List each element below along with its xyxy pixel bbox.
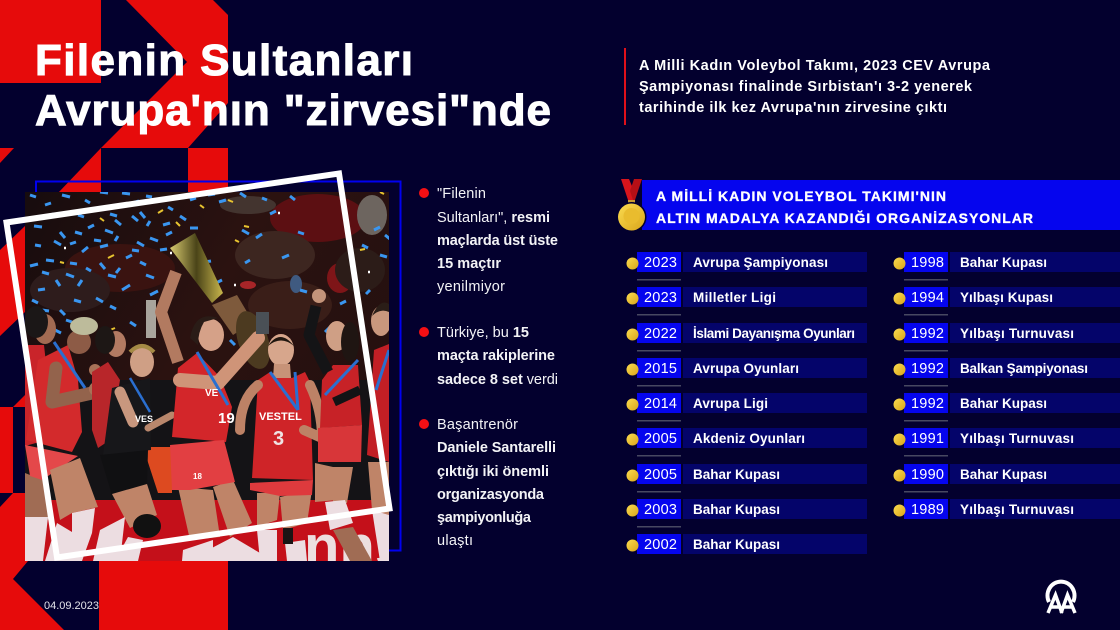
row 1989 Yılbaşı Turnuvası: Yılbaşı Turnuvası [960, 502, 1074, 517]
row 1992 Bahar Kupası [894, 393, 1120, 413]
row 2022 İslami Dayanışma Oyunları [626, 323, 867, 343]
row 1992 Bahar Kupası: Bahar Kupası [960, 396, 1047, 411]
row 2023 Avrupa Şampiyonası [626, 252, 867, 272]
row 1992 Yılbaşı Turnuvası: 1992 [911, 326, 944, 342]
separators [637, 279, 948, 528]
player at far right [367, 302, 391, 561]
row 2022 İslami Dayanışma Oyunları: 2022 [644, 326, 677, 342]
row 1998 Bahar Kupası: 1998 [911, 255, 944, 271]
row 1990 Bahar Kupası [894, 464, 1120, 484]
row 2023 Avrupa Şampiyonası: Avrupa Şampiyonası [693, 255, 828, 270]
row 1991 Yılbaşı Turnuvası: 1991 [911, 431, 944, 447]
row 2003 Bahar Kupası [626, 499, 867, 519]
bullet: head coach: organizasyonda [437, 487, 545, 503]
background red geometric shapes [0, 0, 228, 630]
crowd colour patches [30, 194, 387, 338]
player number 18: 18 [193, 472, 202, 481]
list header [642, 180, 1120, 230]
player number 18 [170, 312, 269, 561]
bullet: head coach [419, 417, 556, 549]
raised arm and trophy [161, 233, 277, 373]
bullet: unbeaten run: Sultanları", resmi [437, 210, 550, 226]
bullet: unbeaten run: "Filenin [437, 186, 486, 202]
player number 3 [240, 334, 322, 561]
date: 04.09.2023 [44, 600, 99, 612]
player number 3: VESTEL [259, 411, 302, 423]
bullet: head coach: şampiyonluğa [437, 510, 532, 526]
list column: right [894, 252, 1120, 519]
row 2003 Bahar Kupası: Bahar Kupası [693, 502, 780, 517]
row 2022 İslami Dayanışma Oyunları: İslami Dayanışma Oyunları [693, 326, 855, 341]
row 1992 Yılbaşı Turnuvası [894, 323, 1120, 343]
row 1994 Yılbaşı Kupası [894, 287, 1120, 307]
stand and banner behind players [25, 380, 389, 500]
row 1992 Balkan Şampiyonası [894, 358, 1120, 378]
row 2002 Bahar Kupası: 2002 [644, 537, 677, 553]
bullet: sets conceded: sadece 8 set verdi [437, 372, 558, 388]
row 1990 Bahar Kupası: Bahar Kupası [960, 467, 1047, 482]
intro text with red rule: A Milli Kadın Voleybol Takımı, 2023 CEV Avrupa [639, 58, 991, 74]
row 2014 Avrupa Ligi: Avrupa Ligi [693, 396, 768, 411]
row 2005 Akdeniz Oyunları: 2005 [644, 431, 677, 447]
player number 18: 19 [218, 410, 235, 427]
banner letters: nns [304, 514, 407, 579]
row 2014 Avrupa Ligi: 2014 [644, 396, 677, 412]
row 2015 Avrupa Oyunları: 2015 [644, 361, 677, 377]
player on the right [309, 289, 372, 561]
intro text with red rule [624, 48, 991, 125]
row 1989 Yılbaşı Turnuvası: 1989 [911, 502, 944, 518]
row 2002 Bahar Kupası [626, 534, 867, 554]
list column: left [626, 252, 867, 554]
player number 18: VE [205, 388, 219, 399]
row 2023 Milletler Ligi [626, 287, 867, 307]
row 1991 Yılbaşı Turnuvası [894, 428, 1120, 448]
intro text with red rule: Şampiyonası finalinde Sırbistan'ı 3-2 yenerek [639, 79, 973, 95]
row 1992 Yılbaşı Turnuvası: Yılbaşı Turnuvası [960, 326, 1074, 341]
player behind [92, 326, 126, 448]
bullet: unbeaten run: maçlarda üst üste [437, 233, 558, 249]
icon: gold medal [616, 179, 646, 232]
row 2003 Bahar Kupası: 2003 [644, 502, 677, 518]
bullet: head coach: Daniele Santarelli [437, 440, 556, 456]
title: Avrupa'nın "zirvesi"nde [35, 86, 551, 135]
row 2023 Avrupa Şampiyonası: 2023 [644, 255, 677, 271]
intro text with red rule: tarihinde ilk kez Avrupa'nın zirvesine çıktı [639, 100, 947, 116]
title: Filenin Sultanları [35, 36, 413, 85]
row 2005 Bahar Kupası [626, 464, 867, 484]
icon: AA logo [1048, 582, 1075, 613]
player with white hair and tattoos [25, 317, 103, 561]
bullet: unbeaten run: yenilmiyor [437, 279, 505, 295]
row 2005 Akdeniz Oyunları: Akdeniz Oyunları [693, 431, 805, 446]
far-left player [24, 306, 56, 561]
row 2014 Avrupa Ligi [626, 393, 867, 413]
bullet: sets conceded [419, 325, 558, 388]
row 1994 Yılbaşı Kupası: 1994 [911, 290, 944, 306]
bullet: head coach: ulaştı [437, 533, 473, 549]
list header: ALTIN MADALYA KAZANDIĞI ORGANİZASYONLAR [656, 209, 1033, 226]
row 2015 Avrupa Oyunları [626, 358, 867, 378]
row 1990 Bahar Kupası: 1990 [911, 467, 944, 483]
title [35, 36, 551, 135]
row 1989 Yılbaşı Turnuvası [894, 499, 1120, 519]
row 2005 Bahar Kupası: 2005 [644, 467, 677, 483]
bullet: unbeaten run [419, 186, 558, 295]
team photo [24, 192, 407, 579]
photo white frame [6, 174, 390, 558]
bullet: head coach: Başantrenör [437, 417, 518, 433]
row 2023 Milletler Ligi: Milletler Ligi [693, 290, 776, 305]
row 1992 Bahar Kupası: 1992 [911, 396, 944, 412]
player in black kit: VES [135, 414, 153, 424]
player in black kit [93, 346, 172, 561]
confetti [30, 192, 390, 349]
row 1998 Bahar Kupası [894, 252, 1120, 272]
list header: A MİLLİ KADIN VOLEYBOL TAKIMI'NIN [656, 188, 946, 204]
row 2023 Milletler Ligi: 2023 [644, 290, 677, 306]
bullet: head coach: çıktığı iki önemli [437, 464, 549, 480]
bullet: sets conceded: Türkiye, bu 15 [437, 325, 529, 341]
bullet: sets conceded: maçta rakiplerine [437, 348, 555, 364]
row 1991 Yılbaşı Turnuvası: Yılbaşı Turnuvası [960, 431, 1074, 446]
row 1992 Balkan Şampiyonası: 1992 [911, 361, 944, 377]
row 1992 Balkan Şampiyonası: Balkan Şampiyonası [960, 361, 1088, 376]
row 2005 Bahar Kupası: Bahar Kupası [693, 467, 780, 482]
blue photo outline [36, 182, 400, 550]
player number 3: 3 [273, 428, 284, 450]
row 2002 Bahar Kupası: Bahar Kupası [693, 537, 780, 552]
row 2005 Akdeniz Oyunları [626, 428, 867, 448]
row 1994 Yılbaşı Kupası: Yılbaşı Kupası [960, 290, 1053, 305]
row 1998 Bahar Kupası: Bahar Kupası [960, 255, 1047, 270]
bullet: unbeaten run: 15 maçtır [437, 256, 501, 272]
row 2015 Avrupa Oyunları: Avrupa Oyunları [693, 361, 799, 376]
